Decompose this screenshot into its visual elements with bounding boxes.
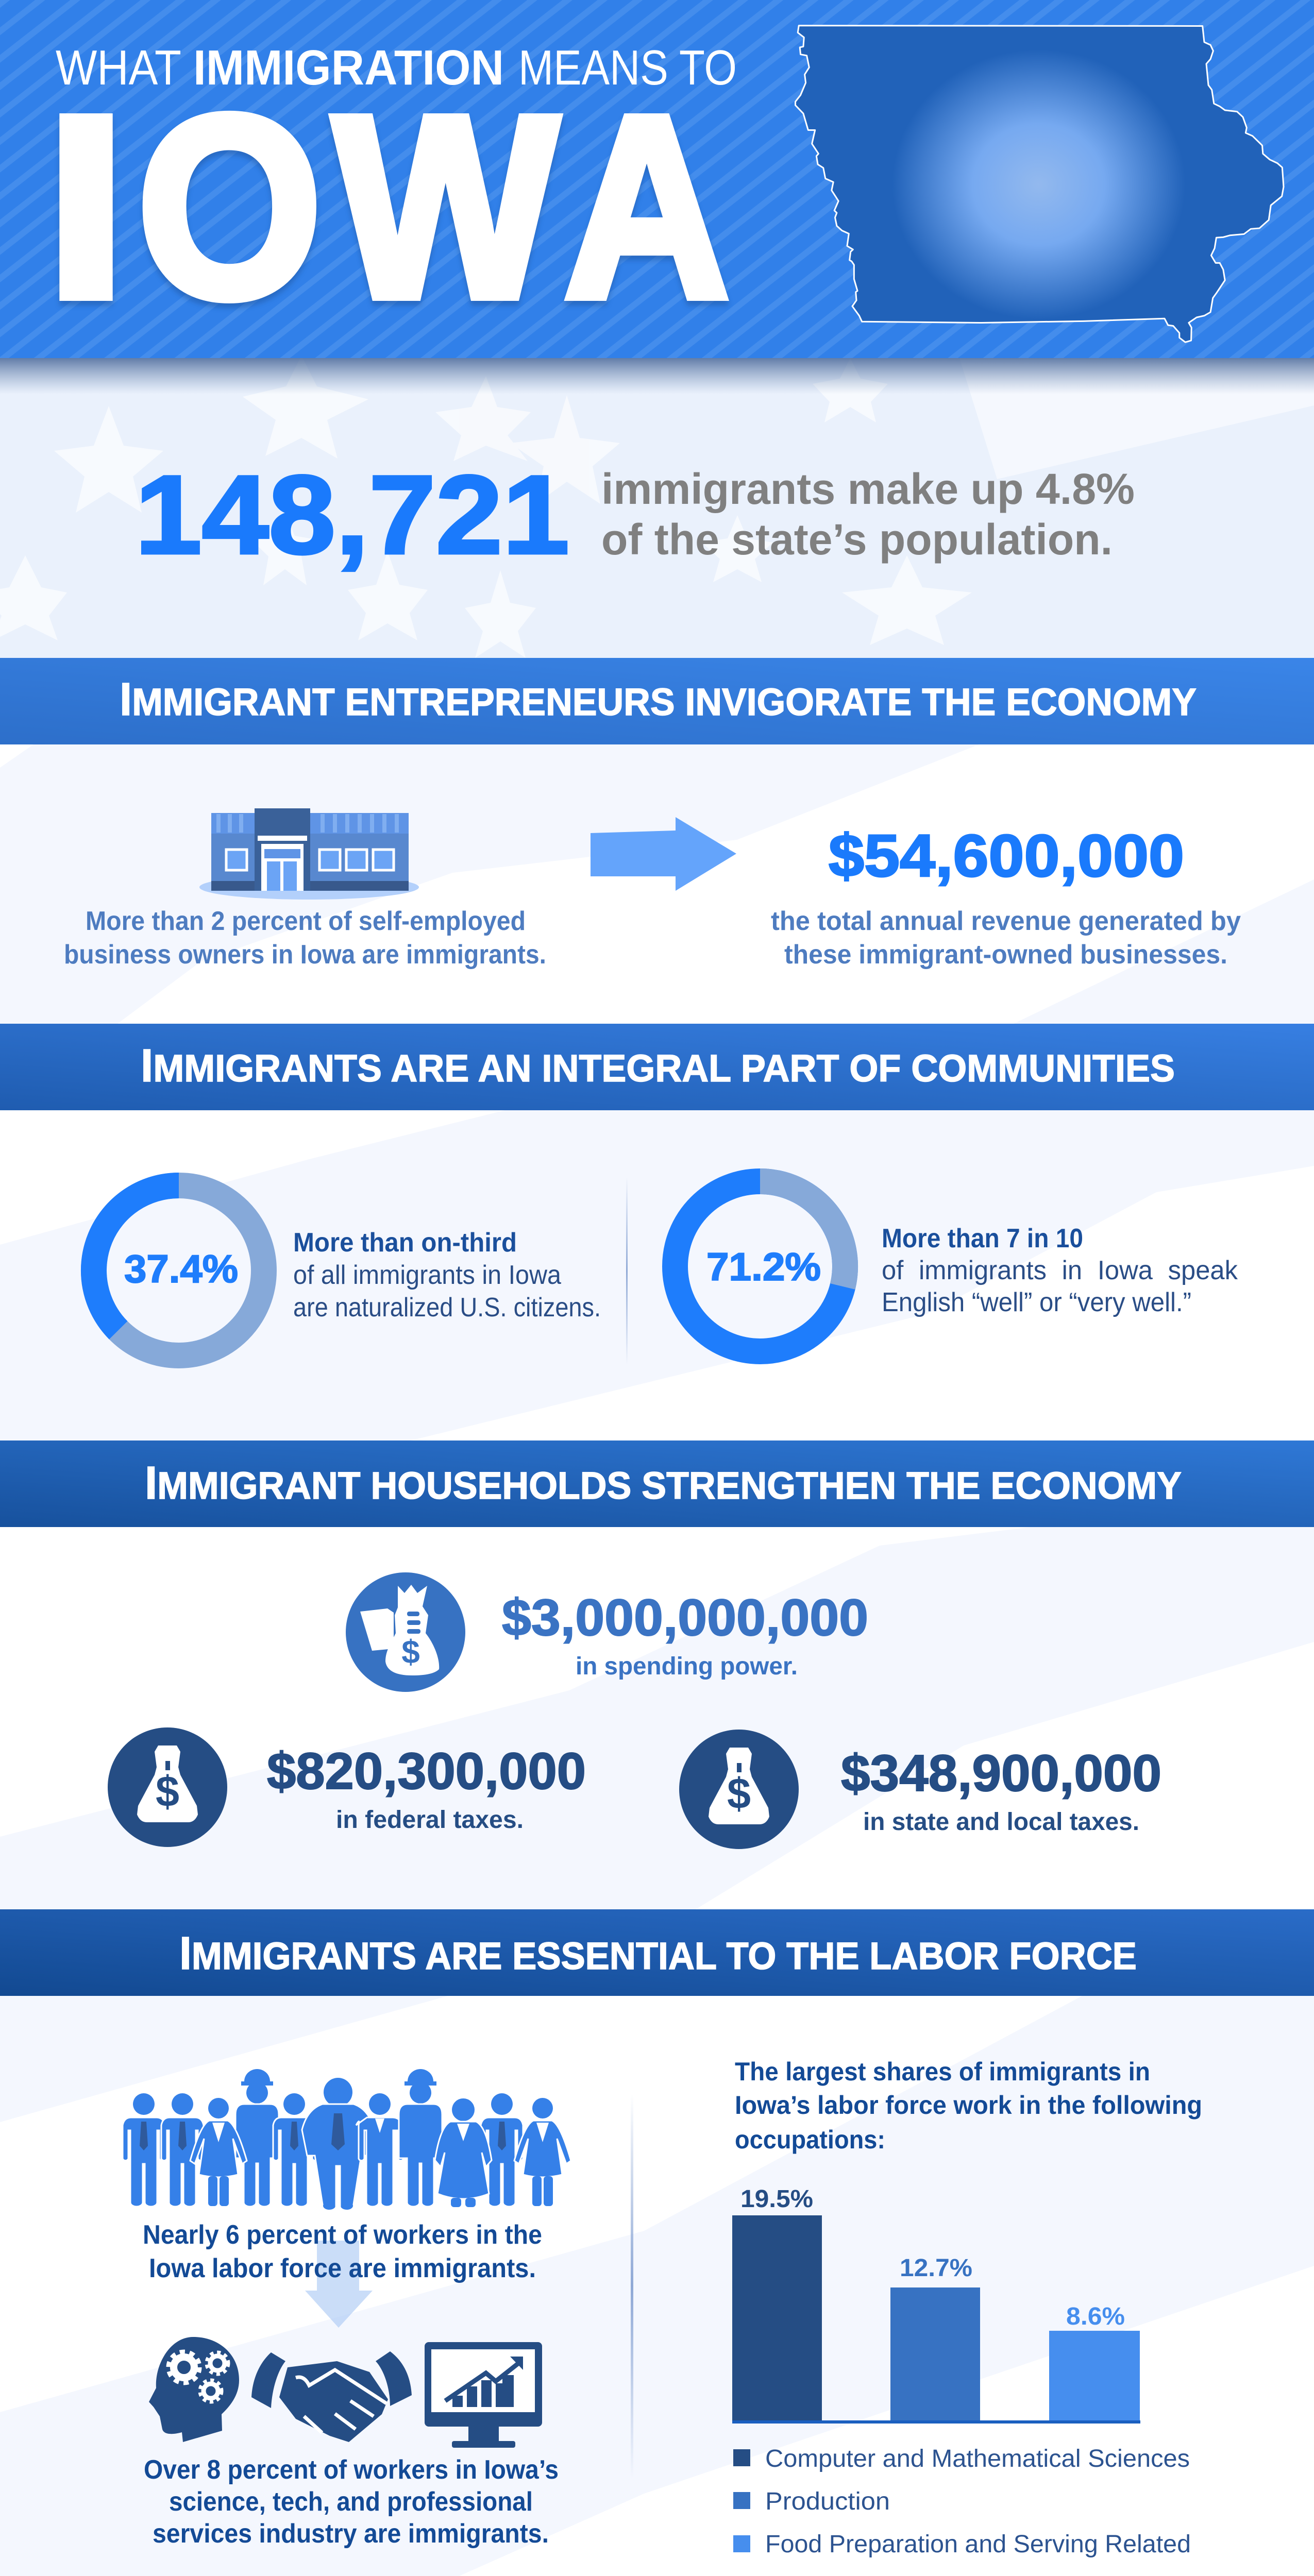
- panel: flag background with stars: [0, 355, 1314, 658]
- icon: handshake: [251, 2351, 412, 2442]
- text: science and tech workers: Over 8 percent of workers in Iowa’s: [144, 2455, 559, 2485]
- header panel: [0, 0, 1314, 394]
- heading: what immigration means to: WHAT: [56, 40, 181, 95]
- statistic: state and local taxes: $348,900,000: [841, 1744, 1161, 1802]
- icon: hand holding money bag: $: [401, 1633, 420, 1670]
- title: Iowa: I: [46, 62, 126, 350]
- bar chart: occupations: 19.5%: [740, 2185, 813, 2213]
- chart legend: Computer and Mathematical Sciences: [765, 2445, 1190, 2472]
- text: self-employed share: business owners in Iowa are immigrants.: [64, 940, 546, 970]
- text: science and tech workers: science, tech, and professional: [169, 2487, 533, 2517]
- statistic: 148,721 immigrants: immigrants make up 4.8%: [601, 465, 1135, 513]
- chart heading: The largest shares of immigrants in: [735, 2057, 1150, 2086]
- text: English proficiency: of immigrants in Iowa speak: [882, 1256, 1238, 1285]
- donut chart: 37.4%: 37.4%: [124, 1247, 238, 1291]
- page background: [0, 744, 1314, 2576]
- icon: storefront: [199, 808, 419, 900]
- statistic: 148,721 immigrants: of the state’s population.: [601, 515, 1113, 564]
- text: science and tech workers: services industry are immigrants.: [153, 2519, 549, 2549]
- statistic: 148,721 immigrants: 148,721: [135, 452, 569, 577]
- text: share of workers: Iowa labor force are immigrants.: [149, 2253, 536, 2283]
- donut chart: 37.4%: [94, 1185, 264, 1355]
- title: Iowa: A: [565, 62, 729, 350]
- arrow: right: [591, 817, 736, 891]
- section heading: households: IMMIGRANT HOUSEHOLDS STRENGTHEN THE ECONOMY: [145, 1458, 1182, 1509]
- statistic: spending power: in spending power.: [576, 1653, 798, 1680]
- heading: what immigration means to: [56, 40, 737, 95]
- section heading: households: [0, 1440, 1314, 1527]
- statistic: state and local taxes: [841, 1744, 1161, 1836]
- text: English proficiency: English “well” or “very well.”: [882, 1287, 1191, 1317]
- icon: money bag, state and local: $: [727, 1769, 751, 1818]
- statistic: 148,721 immigrants: [135, 452, 1135, 577]
- title: Iowa: O: [138, 62, 322, 350]
- statistic: spending power: [502, 1589, 868, 1680]
- bar chart: occupations: 8.6%: [1066, 2303, 1125, 2330]
- section heading: entrepreneurs: IMMIGRANT ENTREPRENEURS INVIGORATE THE ECONOMY: [120, 674, 1197, 725]
- section heading: entrepreneurs: [0, 658, 1314, 744]
- text: English proficiency: More than 7 in 10: [882, 1224, 1083, 1253]
- text: naturalized citizens: of all immigrants in Iowa: [293, 1260, 561, 1290]
- text: self-employed share: [64, 906, 546, 970]
- statistic: state and local taxes: in state and local taxes.: [863, 1808, 1139, 1836]
- statistic: revenue: $54,600,000: [829, 822, 1184, 889]
- text: naturalized citizens: are naturalized U.S. citizens.: [293, 1293, 601, 1323]
- text: naturalized citizens: More than on-third: [293, 1228, 517, 1258]
- title: Iowa: I: [46, 67, 126, 355]
- title: Iowa: [46, 62, 729, 355]
- map of Iowa: [796, 26, 1284, 342]
- icon: hand holding money bag: [346, 1572, 465, 1692]
- icon: money bag, federal: [108, 1727, 227, 1847]
- statistic: federal taxes: in federal taxes.: [336, 1806, 524, 1834]
- title: Iowa: W: [334, 67, 560, 355]
- donut chart: 71.2%: 71.2%: [706, 1245, 821, 1289]
- icon: money bag, federal: $: [156, 1767, 179, 1816]
- heading: what immigration means to: MEANS TO: [518, 40, 737, 95]
- icon: money bag, state and local: [679, 1730, 799, 1849]
- icon: group of workers: [123, 2069, 571, 2211]
- section heading: labor force: IMMIGRANTS ARE ESSENTIAL TO THE LABOR FORCE: [179, 1928, 1137, 1979]
- title: Iowa: W: [334, 62, 560, 350]
- section heading: labor force: [0, 1909, 1314, 1996]
- chart legend: [733, 2445, 1191, 2558]
- bar chart: occupations: [732, 2185, 1140, 2424]
- text: science and tech workers: [144, 2455, 559, 2549]
- arrow: down: [305, 2241, 373, 2328]
- chart legend: Production: [765, 2488, 890, 2515]
- chart heading: [735, 2057, 1202, 2154]
- statistic: federal taxes: [267, 1742, 586, 1834]
- title: Iowa: O: [138, 67, 322, 355]
- bar chart: occupations: 12.7%: [900, 2255, 972, 2282]
- icon: head with gears: [149, 2337, 239, 2442]
- chart heading: occupations:: [735, 2125, 885, 2154]
- chart heading: Iowa’s labor force work in the following: [735, 2091, 1202, 2120]
- statistic: revenue: these immigrant-owned businesses.: [784, 940, 1227, 970]
- text: English proficiency: [882, 1224, 1238, 1317]
- text: naturalized citizens: [293, 1228, 601, 1323]
- text: share of workers: [143, 2220, 542, 2283]
- icon: monitor with chart: [425, 2342, 542, 2448]
- text: self-employed share: More than 2 percent of self-employed: [86, 906, 526, 936]
- statistic: federal taxes: $820,300,000: [267, 1742, 586, 1800]
- donut chart: 71.2%: [675, 1181, 845, 1351]
- statistic: revenue: the total annual revenue generated by: [771, 906, 1241, 936]
- statistic: spending power: $3,000,000,000: [502, 1589, 868, 1647]
- heading: what immigration means to: IMMIGRATION: [193, 40, 504, 95]
- text: share of workers: Nearly 6 percent of workers in the: [143, 2220, 542, 2250]
- section heading: communities: [0, 1024, 1314, 1110]
- title: Iowa: A: [565, 67, 729, 355]
- section heading: communities: IMMIGRANTS ARE AN INTEGRAL PART OF COMMUNITIES: [141, 1040, 1175, 1092]
- chart legend: Food Preparation and Serving Related: [765, 2531, 1191, 2558]
- statistic: revenue: [771, 822, 1241, 970]
